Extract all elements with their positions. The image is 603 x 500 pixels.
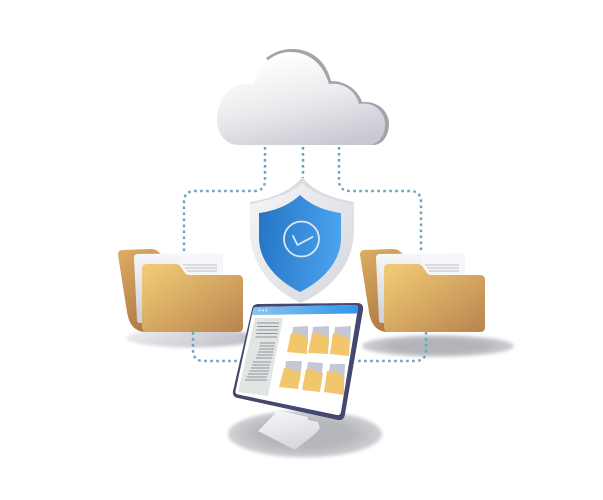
monitor (233, 303, 363, 420)
shadow: right folder (362, 335, 514, 357)
connector lines: dotted network (184, 147, 426, 361)
icon: check circle (284, 222, 319, 256)
icon: security shield (250, 177, 354, 303)
folder thumbnails (279, 326, 351, 395)
shadow: monitor (228, 410, 382, 458)
thumbnail 6 (324, 364, 345, 395)
thumbnail 3 (330, 326, 351, 356)
monitor screen (235, 305, 358, 415)
icon: cloud (217, 49, 389, 145)
thumbnail 4 (279, 361, 302, 389)
shadow: left folder (126, 328, 258, 348)
window dots (258, 310, 268, 312)
right folder (360, 249, 485, 332)
thumbnail 1 (287, 326, 308, 354)
thumbnail 5 (302, 362, 323, 392)
thumbnail 2 (308, 326, 329, 354)
sidebar document (238, 318, 283, 396)
title bar (252, 305, 358, 315)
monitor stand (258, 410, 320, 450)
monitor frame (233, 303, 363, 420)
left folder (118, 249, 243, 332)
